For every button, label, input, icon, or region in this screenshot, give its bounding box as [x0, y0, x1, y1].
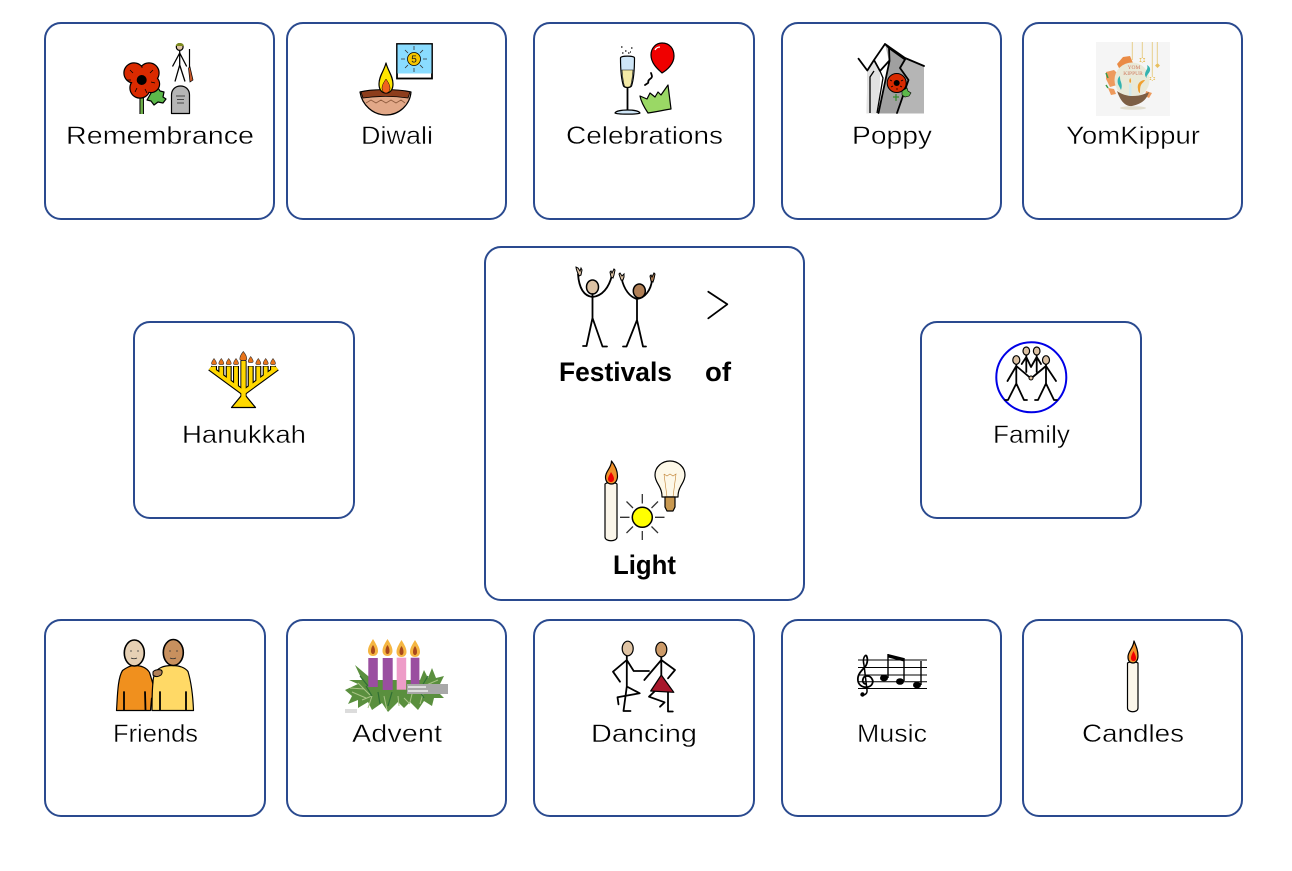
icon: music stave and notes [858, 654, 927, 697]
panel: Family [921, 322, 1141, 518]
panel: Hanukkah [134, 322, 354, 518]
icon: Yom Kippur picture [1096, 42, 1170, 116]
panel: Poppy [782, 23, 1001, 219]
panel: Music [782, 620, 1001, 816]
label: Dancing: Dancing [591, 720, 697, 748]
icon: suit with poppy [858, 44, 924, 114]
icon: family in a circle [996, 342, 1066, 412]
label: Hanukkah: Hanukkah [182, 421, 306, 449]
label: Family: Family [993, 421, 1071, 449]
icon: Yom Kippur picture: KIPPUR [1123, 71, 1143, 77]
label: Music: Music [857, 720, 927, 748]
label: Diwali: Diwali [361, 122, 433, 150]
icon: two people dancing [613, 641, 675, 712]
heading: Light: Light [613, 550, 676, 580]
icon: diya lamp and calendar [360, 44, 432, 115]
label: Advent: Advent [352, 720, 442, 748]
label: Celebrations: Celebrations [566, 122, 723, 150]
heading: Festivals: Festivals [559, 357, 672, 387]
icon: Yom Kippur picture: YOM [1128, 65, 1141, 71]
label: Friends: Friends [113, 720, 198, 748]
label: Candles: Candles [1082, 720, 1184, 748]
icon: champagne, balloon and party hat [615, 43, 674, 114]
panel: Festivals of Light title [485, 247, 804, 600]
icon: advent wreath with candles [345, 639, 448, 713]
icon: poppy, soldier and gravestone [124, 43, 193, 114]
icon: greater-than symbol for of [708, 292, 727, 318]
panel: Advent [287, 620, 506, 816]
panel: Dancing [534, 620, 754, 816]
label: Remembrance: Remembrance [66, 122, 254, 150]
icon: candle [1128, 641, 1138, 712]
panel: Remembrance [45, 23, 274, 219]
label: Poppy: Poppy [852, 122, 933, 150]
label: YomKippur: YomKippur [1066, 122, 1200, 150]
panel: Candles [1023, 620, 1242, 816]
panel: Diwali [287, 23, 506, 219]
icon: two people celebrating [576, 267, 655, 346]
icon: diya lamp and calendar: 5 [411, 54, 417, 66]
icon: two friends [116, 640, 194, 710]
icon: menorah [210, 352, 277, 408]
panel: YomKippur [1023, 23, 1242, 219]
panel: Celebrations [534, 23, 754, 219]
heading: of: of [705, 357, 732, 387]
panel: Friends [45, 620, 265, 816]
icon: candle, sun and light bulb [605, 461, 685, 541]
